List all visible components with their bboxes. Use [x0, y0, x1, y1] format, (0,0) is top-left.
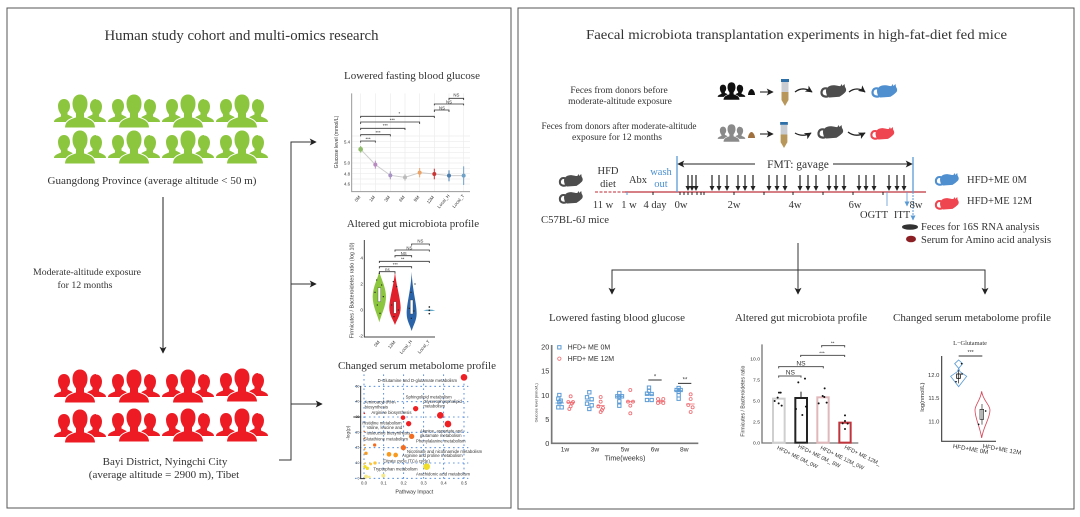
chart: glucose dot plot: Glucose level (mmol/L)	[534, 382, 538, 422]
chart: L-Glutamate violin: 12.0	[928, 373, 940, 379]
chart: glucose line: 3M	[383, 195, 391, 203]
chart: glucose line: Local_T	[451, 193, 466, 209]
chart: glucose dot plot: **	[683, 378, 688, 384]
timeline: FMT schedule: 0w	[675, 200, 688, 211]
timeline: FMT schedule	[593, 156, 926, 221]
label: moderate-altitude exposure: Moderate-altitude exposure	[33, 267, 142, 278]
chart: glucose line: *	[398, 111, 400, 116]
chart: L-Glutamate violin: HFD+ME 0M	[952, 443, 989, 456]
chart: metabolome pathway bubbles: Phenylalanine metabolism	[416, 439, 466, 444]
icon group: Guangdong cohort	[54, 94, 268, 164]
chart: microbiota violin: 0	[360, 307, 363, 312]
chart: glucose dot plot	[534, 342, 698, 463]
timeline: FMT schedule: HFD	[597, 166, 619, 177]
chart: metabolome pathway bubbles	[345, 374, 483, 495]
label: moderate-altitude exposure: for 12 months	[58, 280, 113, 291]
chart: L-Glutamate violin: log(nmol/L)	[920, 382, 926, 412]
chart: glucose line: 9M	[413, 195, 421, 203]
timeline: FMT schedule: 4 day	[643, 200, 667, 211]
chart: metabolome pathway bubbles: Tryptophan metabolism	[373, 466, 418, 471]
timeline: FMT schedule: 2w	[728, 200, 741, 211]
chart: F/B ratio bars: HFD+ ME 12M_	[843, 445, 882, 468]
chart: metabolome pathway bubbles: Nicotinate and nicotinamide metabolism	[407, 449, 483, 454]
heading: changed metabolome right: Changed serum metabolome profile	[893, 312, 1051, 324]
chart: F/B ratio bars: 0.0	[753, 440, 760, 446]
chart: glucose dot plot: 1w	[561, 447, 569, 454]
legend: mouse groups: HFD+ME 12M	[967, 196, 1033, 207]
chart: L-Glutamate violin	[920, 340, 1022, 457]
arrows: branch to results	[612, 243, 985, 294]
chart: F/B ratio bars: HFD+ ME 0M_0W	[776, 445, 819, 471]
chart: metabolome pathway bubbles: isoleucine biosynthesis	[367, 430, 410, 435]
chart: F/B ratio bars: 10.0	[750, 357, 760, 363]
label: Bayi District: Bayi District, Nyingchi City	[103, 456, 228, 468]
chart: glucose line: ***	[383, 123, 388, 128]
heading: lowered glucose right: Lowered fasting blood glucose	[549, 312, 685, 324]
chart: microbiota violin: ***	[393, 262, 398, 267]
chart: metabolome pathway bubbles: 50	[356, 384, 359, 388]
chart: glucose line: 12M	[426, 195, 435, 205]
chart: metabolome pathway bubbles: 40	[356, 400, 359, 404]
panel: human study cohort	[7, 8, 511, 508]
chart: metabolome pathway bubbles: Arginine and proline metabolism	[402, 453, 463, 458]
chart: L-Glutamate violin: ***	[968, 350, 974, 356]
chart: glucose dot plot: 20	[541, 342, 549, 351]
chart: microbiota violin: NS	[401, 251, 407, 256]
chart: metabolome pathway bubbles: Pathway Impact	[395, 489, 434, 495]
label: Bayi District: (average altitude = 2900 m), Tibet	[89, 469, 239, 481]
heading: altered microbiota left: Altered gut microbiota profile	[347, 218, 479, 230]
chart: microbiota violin: **	[401, 257, 405, 262]
chart: L-Glutamate violin: 11.5	[928, 396, 939, 402]
heading: FMT experiments: Faecal microbiota transplantation experiments in high-fat-diet fed mice	[586, 28, 1007, 43]
timeline: FMT schedule: ITT	[894, 210, 911, 221]
chart: L-Glutamate violin: 11.0	[928, 419, 940, 425]
chart: glucose dot plot: *	[654, 374, 657, 380]
workflow: after exposure	[718, 122, 894, 148]
legend: mouse groups: HFD+ME 0M	[967, 175, 1028, 186]
chart: metabolome pathway bubbles: 0.3	[421, 481, 427, 486]
timeline: FMT schedule: Abx	[629, 175, 648, 186]
chart: metabolome pathway bubbles: Glycerophospholipid	[423, 399, 462, 404]
label: donors before	[568, 85, 672, 107]
chart: glucose dot plot: 5	[545, 415, 549, 424]
label: donors after	[542, 121, 696, 143]
chart: glucose line: 6M	[398, 195, 406, 203]
timeline: FMT schedule: 1 w	[621, 200, 637, 211]
chart: microbiota violin: ns	[385, 267, 390, 272]
chart: glucose line: ***	[365, 136, 371, 141]
chart: metabolome pathway bubbles: D-Glutamine and D-glutamate metabolism	[378, 378, 457, 383]
chart: metabolome pathway bubbles: Glutathione metabolism	[363, 437, 408, 442]
chart: microbiota violin	[350, 238, 435, 355]
workflow: before exposure	[718, 79, 897, 106]
chart: microbiota violin: Local_T	[417, 339, 431, 355]
label: Guangdong Province: Guangdong Province (average altitude < 50 m)	[48, 176, 257, 187]
chart: glucose line: ***	[375, 130, 381, 135]
icon: C57BL mice	[541, 174, 609, 226]
chart: metabolome pathway bubbles: 0.5	[461, 481, 468, 486]
chart: metabolome pathway bubbles: Aminoacyl-tRNA	[365, 400, 396, 405]
timeline: FMT schedule: 4w	[789, 200, 802, 211]
chart: glucose line	[334, 93, 470, 209]
heading: altered microbiota right: Altered gut microbiota profile	[735, 312, 867, 324]
label: donors after: exposure for 12 months	[572, 132, 662, 143]
chart: metabolome pathway bubbles: Sphingolipid metabolism	[406, 394, 452, 399]
chart: F/B ratio bars: 5.0	[753, 399, 760, 405]
chart: glucose line: 4.6	[344, 182, 351, 187]
chart: glucose line: NS	[453, 93, 459, 98]
chart: glucose dot plot: 5w	[621, 447, 629, 454]
chart: L-Glutamate violin: L−Glutamate	[953, 340, 987, 347]
label: donors before: Feces from donors before	[570, 85, 668, 96]
chart: L-Glutamate violin: HFD+ME 12M	[982, 443, 1022, 457]
legend: samples: Feces for 16S RNA analysis	[921, 222, 1039, 233]
timeline: FMT schedule: wash	[650, 167, 673, 178]
chart: glucose line: Glucose level (mmol/L)	[334, 115, 340, 168]
chart: metabolome pathway bubbles: Citrate cycle (TCA cycle)	[383, 459, 430, 464]
label: donors after: Feces from donors after moderate-altitude	[542, 121, 696, 132]
chart: glucose line: 5.0	[344, 161, 351, 166]
timeline: FMT schedule: 6w	[849, 200, 862, 211]
chart: glucose line: 4.8	[344, 171, 351, 176]
timeline: FMT schedule: OGTT	[860, 210, 889, 221]
chart: glucose line: NS	[446, 99, 452, 104]
chart: F/B ratio bars: 2.5	[753, 420, 760, 426]
chart: glucose dot plot: 6w	[651, 447, 659, 454]
icon group: Tibet cohort	[54, 368, 268, 443]
chart: metabolome pathway bubbles: biosynthesis	[365, 404, 388, 409]
legend: samples: Serum for Amino acid analysis	[921, 235, 1051, 246]
chart: microbiota violin: 0M	[373, 340, 381, 348]
chart: metabolome pathway bubbles: glutamate metabolism	[420, 433, 462, 438]
heading: lowered glucose left: Lowered fasting blood glucose	[344, 70, 480, 82]
chart: glucose dot plot: 10	[541, 391, 549, 400]
chart: F/B ratio bars	[740, 340, 882, 472]
chart: microbiota violin: Firmicutes / Bacteroidetes ratio (log 10)	[350, 242, 356, 338]
chart: metabolome pathway bubbles: 15	[356, 446, 359, 450]
chart: glucose line: NS	[439, 105, 445, 110]
chart: glucose dot plot: Time(weeks)	[605, 455, 645, 463]
chart: F/B ratio bars: HFD+ ME 0M_ 8W	[797, 444, 842, 470]
chart: microbiota violin: NS	[417, 238, 423, 243]
timeline: FMT schedule: 11 w	[593, 200, 614, 211]
chart: microbiota violin: 2	[360, 281, 363, 286]
chart: metabolome pathway bubbles: Valine, leucine and	[367, 425, 403, 430]
chart: metabolome pathway bubbles: Histidine metabolism	[362, 421, 402, 426]
chart: metabolome pathway bubbles: 0.1	[381, 481, 387, 486]
chart: glucose dot plot: 15	[541, 367, 549, 376]
chart: F/B ratio bars: 7.5	[753, 378, 760, 384]
chart: F/B ratio bars: Firmicutes / Bacteroidetes ratio	[740, 365, 746, 437]
chart: glucose line: 1M	[368, 195, 376, 203]
legend: samples	[902, 222, 1051, 246]
chart: F/B ratio bars: NS	[796, 360, 806, 367]
timeline: FMT schedule: out	[654, 179, 668, 190]
chart: metabolome pathway bubbles: -log(p)	[345, 425, 351, 440]
chart: metabolome pathway bubbles: 0	[357, 476, 359, 480]
heading: human study: Human study cohort and multi-omics research	[104, 28, 379, 44]
icon: C57BL mice: C57BL-6J mice	[541, 214, 609, 226]
chart: metabolome pathway bubbles: 0.0	[361, 481, 368, 486]
chart: metabolome pathway bubbles: 0.2	[401, 481, 407, 486]
chart: metabolome pathway bubbles: Arginine biosynthesis	[371, 410, 412, 415]
chart: microbiota violin: 12M	[387, 340, 397, 350]
chart: metabolome pathway bubbles: 10	[356, 461, 359, 465]
timeline: FMT schedule: 8w	[910, 200, 923, 211]
chart: glucose dot plot: HFD+ ME 12M	[568, 356, 614, 363]
chart: glucose dot plot: 8w	[680, 447, 689, 454]
chart: F/B ratio bars: NS	[786, 370, 796, 377]
chart: microbiota violin: Local_H	[399, 339, 413, 355]
label: Bayi District	[89, 456, 239, 481]
chart: glucose dot plot: 3w	[591, 447, 599, 454]
chart: glucose line: 0M	[354, 195, 362, 203]
chart: glucose dot plot: 0	[545, 439, 549, 448]
chart: glucose dot plot: HFD+ ME 0M	[568, 344, 610, 351]
panel: faecal microbiota transplantation	[518, 8, 1074, 509]
chart: glucose line: 5.4	[344, 139, 351, 144]
chart: microbiota violin: -2	[359, 333, 363, 338]
chart: microbiota violin: 4	[360, 256, 363, 261]
heading: changed metabolome left: Changed serum metabolome profile	[338, 360, 496, 372]
label: moderate-altitude exposure	[33, 267, 142, 291]
chart: metabolome pathway bubbles: metabolism	[423, 404, 446, 409]
label: donors before: moderate-altitude exposure	[568, 97, 672, 107]
chart: metabolome pathway bubbles: Alanine, aspartate and	[420, 428, 463, 433]
chart: metabolome pathway bubbles: 20	[356, 430, 359, 434]
chart: glucose line: Local_H	[436, 193, 451, 209]
chart: F/B ratio bars: **	[831, 340, 835, 345]
timeline: FMT schedule: diet	[600, 179, 616, 190]
chart: metabolome pathway bubbles: Arachidonic acid metabolism	[416, 471, 471, 476]
chart: F/B ratio bars: HFD+ ME 12M_0W	[819, 445, 865, 472]
chart: metabolome pathway bubbles: 30	[356, 415, 359, 419]
chart: glucose line: ***	[390, 117, 395, 122]
arrows: bracket to outcomes	[279, 142, 322, 460]
chart: microbiota violin: NS	[406, 245, 412, 250]
chart: F/B ratio bars: ***	[819, 350, 825, 355]
legend: mouse groups	[936, 173, 1033, 210]
timeline: FMT schedule: FMT: gavage	[767, 159, 829, 171]
chart: metabolome pathway bubbles: 0.4	[441, 481, 447, 486]
arrow: exposure down	[162, 197, 164, 353]
